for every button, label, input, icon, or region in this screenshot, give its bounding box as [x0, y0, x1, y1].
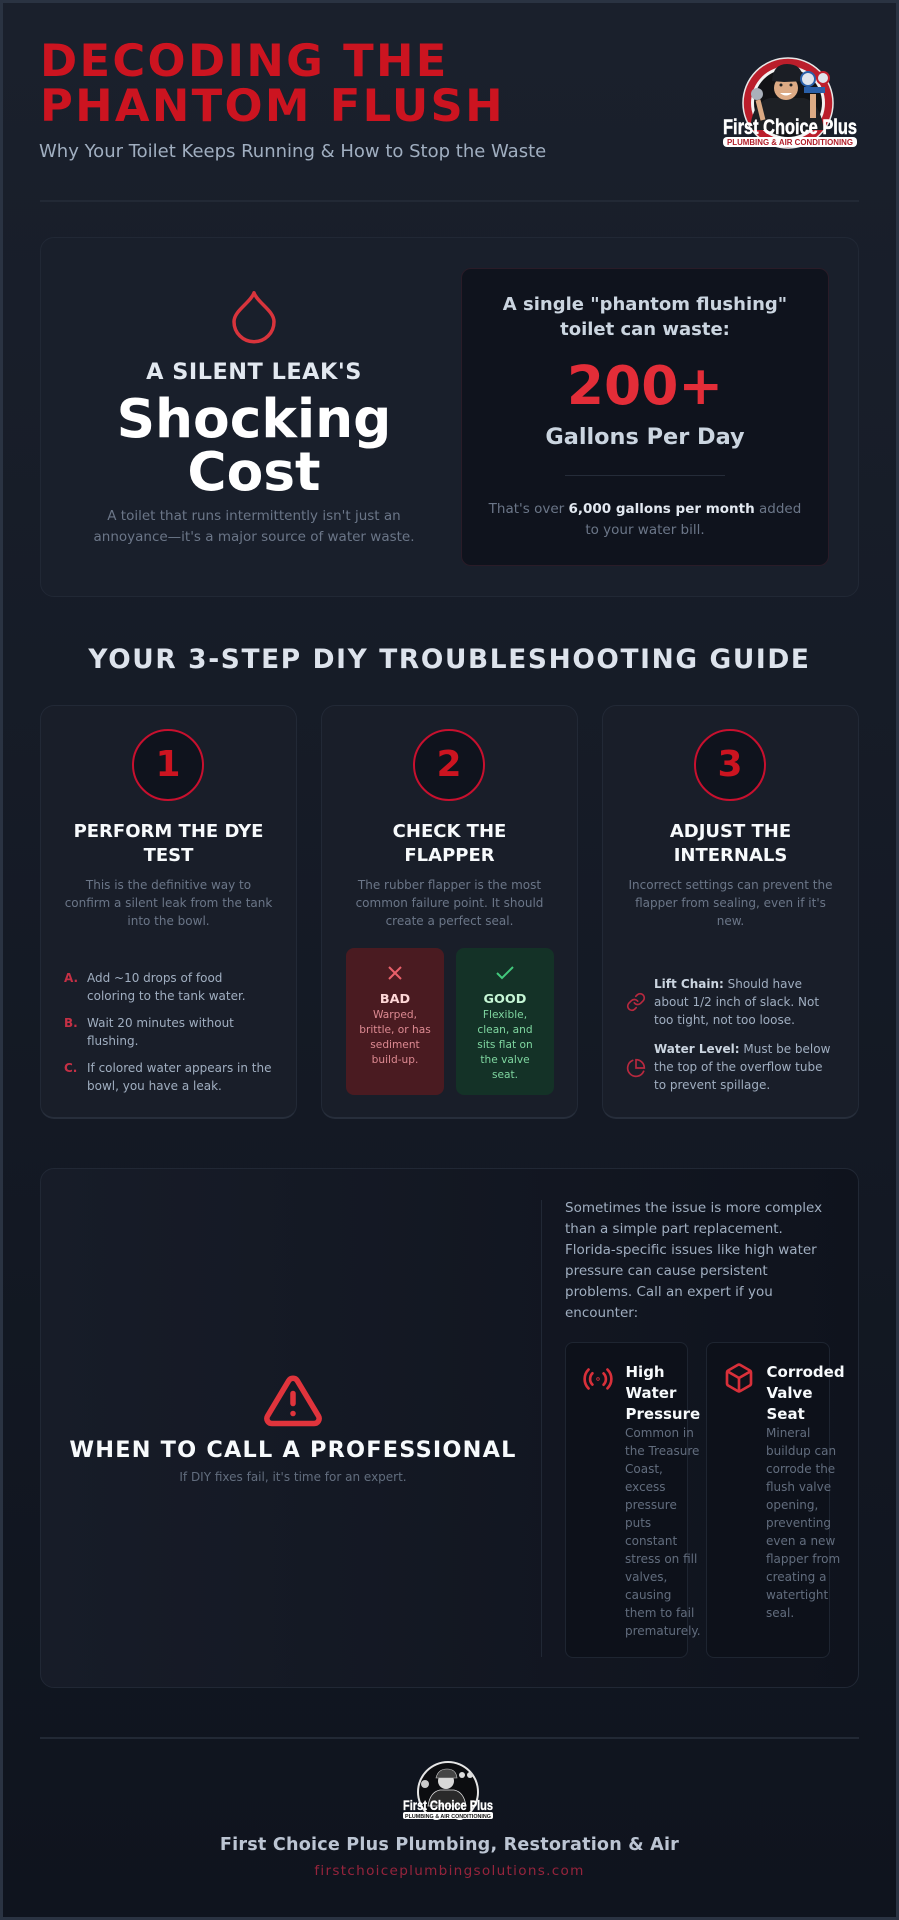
icon: cross [388, 966, 402, 980]
high water pressure description: prematurely. [625, 1624, 701, 1638]
step 3 description: Incorrect settings can prevent the [628, 878, 832, 892]
step 1 description: into the bowl. [127, 914, 210, 928]
call-out heading: WHEN TO CALL A PROFESSIONAL [69, 1437, 517, 1463]
call-out intro text: encounter: [565, 1305, 638, 1321]
corroded valve seat description: corrode the [766, 1462, 835, 1476]
bad description: brittle, or has [359, 1024, 431, 1036]
lift chain text: too tight, not too loose. [654, 1013, 795, 1027]
hero heading [117, 387, 391, 503]
lift chain text: Lift Chain: Should have [654, 977, 802, 991]
step 1 title [74, 821, 263, 866]
step 3 description: new. [717, 914, 744, 928]
statistic note [488, 500, 801, 538]
footer logo [403, 1761, 493, 1820]
corroded valve seat description: flush valve [766, 1480, 831, 1494]
high water pressure description [625, 1426, 701, 1638]
step 1 description [65, 878, 272, 928]
statistic lead-in [502, 294, 787, 340]
step 1 list: B. [64, 1016, 78, 1030]
section heading: YOUR 3-STEP DIY TROUBLESHOOTING GUIDE [88, 644, 811, 675]
statistic unit: Gallons Per Day [545, 424, 745, 450]
step 1 list: coloring to the tank water. [87, 988, 246, 1002]
step 2 title: CHECK THE [393, 821, 506, 842]
step 1 list: Wait 20 minutes without [87, 1016, 234, 1030]
high water pressure description: excess [625, 1480, 666, 1494]
bad flapper box [346, 948, 444, 1095]
statistic note: to your water bill. [585, 522, 705, 538]
step 2 description [356, 878, 543, 928]
high water pressure description: puts [625, 1516, 651, 1530]
step 3 title [670, 821, 791, 866]
water level text: the top of the overflow tube [654, 1060, 822, 1074]
statistic note: That's over 6,000 gallons per month added [489, 500, 801, 516]
high water pressure description: Coast, [625, 1462, 663, 1476]
step number 3: 3 [717, 744, 743, 784]
water level text [654, 1042, 830, 1092]
high water pressure description: stress on fill [625, 1552, 697, 1566]
icon: chain link [626, 992, 646, 1012]
good label: GOOD [484, 992, 526, 1007]
panel: shocking cost [40, 237, 859, 597]
corroded valve seat description: flapper from [766, 1552, 840, 1566]
step 1 list: bowl, you have a leak. [87, 1078, 222, 1092]
corroded valve seat description: watertight [766, 1588, 828, 1602]
corroded valve seat description: creating a [766, 1570, 826, 1584]
high water pressure description: pressure [625, 1498, 677, 1512]
step 1 title: PERFORM THE DYE [74, 821, 263, 842]
step number 1 [132, 728, 204, 800]
high water pressure description: causing [625, 1588, 671, 1602]
call-out intro text: pressure can cause persistent [565, 1263, 768, 1279]
panel: step 2 [321, 705, 578, 1119]
high water pressure title: Water [626, 1384, 676, 1402]
corroded valve seat title: Valve [766, 1384, 813, 1402]
footer company name: First Choice Plus Plumbing, Restoration & Air [220, 1835, 679, 1855]
header subtitle: Why Your Toilet Keeps Running & How to Stop the Waste [39, 141, 546, 162]
panel: step 3 [602, 705, 859, 1119]
bad description: build-up. [372, 1054, 418, 1066]
good description: Flexible, [483, 1009, 527, 1021]
high water pressure description: them to fail [625, 1606, 694, 1620]
panel: step 1 [40, 705, 297, 1119]
bad description: Warped, [373, 1009, 417, 1021]
panel: high water pressure [565, 1342, 688, 1658]
corroded valve seat title: Corroded [766, 1363, 845, 1381]
header title [40, 34, 505, 132]
header title: PHANTOM FLUSH [40, 79, 505, 132]
call-out intro text: Florida-specific issues like high water [565, 1242, 817, 1258]
high water pressure description: valves, [625, 1570, 667, 1584]
icon: pie gauge [626, 1058, 646, 1078]
corroded valve seat description: preventing [766, 1516, 831, 1530]
step 3 description: flapper from sealing, even if it's [635, 896, 826, 910]
step number 2 [413, 728, 485, 800]
hero description: A toilet that runs intermittently isn't just an [107, 508, 401, 524]
good description [477, 1009, 533, 1081]
step 1 title: TEST [144, 845, 193, 866]
step 3 description [628, 878, 832, 928]
statistic lead-in: A single "phantom flushing" [503, 294, 787, 314]
hero kicker: A SILENT LEAK'S [146, 359, 362, 385]
high water pressure description: constant [625, 1534, 677, 1548]
hero description [93, 508, 415, 545]
lift chain text: about 1/2 inch of slack. Not [654, 995, 819, 1009]
high water pressure title: High [626, 1363, 665, 1381]
call-out intro text [565, 1200, 822, 1321]
panel: waste statistic [461, 268, 829, 566]
step 1 description: This is the definitive way to [86, 878, 251, 892]
good description: sits flat on [477, 1039, 533, 1051]
header title: DECODING THE [40, 34, 449, 87]
step number 1: 1 [155, 744, 181, 784]
corroded valve seat description: buildup can [766, 1444, 836, 1458]
step 1 list: flushing. [87, 1034, 138, 1048]
water level text: Water Level: Must be below [654, 1042, 830, 1056]
good description: the valve [480, 1054, 530, 1066]
bad description: sediment [370, 1039, 420, 1051]
statistic number: 200+ [567, 354, 723, 417]
step 1 list: C. [64, 1060, 77, 1074]
call-out intro text: Sometimes the issue is more complex [565, 1200, 822, 1216]
step 1 list: If colored water appears in the [87, 1060, 271, 1074]
icon: warning triangle [264, 1376, 322, 1426]
good flapper box [456, 948, 554, 1095]
step 2 title [393, 821, 506, 866]
step 1 list: A. [64, 970, 78, 984]
statistic lead-in: toilet can waste: [560, 318, 730, 340]
step 3 title: ADJUST THE [670, 821, 791, 842]
corroded valve seat description: opening, [766, 1498, 818, 1512]
bad description [359, 1009, 431, 1066]
step 2 description: common failure point. It should [356, 896, 543, 910]
corroded valve seat description [766, 1426, 840, 1620]
step 1 list: Add ~10 drops of food [87, 970, 222, 984]
lift chain text [654, 977, 819, 1027]
header logo [723, 57, 857, 149]
icon: box [726, 1363, 752, 1393]
high water pressure description: Common in [625, 1426, 694, 1440]
corroded valve seat title: Seat [766, 1405, 805, 1423]
icon: water drop [232, 291, 276, 344]
step 3 title: INTERNALS [674, 845, 787, 866]
high water pressure title [626, 1363, 700, 1423]
good description: clean, and [477, 1024, 533, 1036]
hero heading: Shocking [117, 387, 391, 450]
call-out subheading: If DIY fixes fail, it's time for an expert. [179, 1470, 407, 1484]
call-out intro text: problems. Call an expert if you [565, 1284, 773, 1300]
step 2 description: The rubber flapper is the most [358, 878, 541, 892]
panel: corroded valve seat [706, 1342, 830, 1658]
icon: radio signal [583, 1368, 613, 1390]
corroded valve seat title [766, 1363, 845, 1423]
step 2 title: FLAPPER [404, 845, 495, 866]
panel: when to call a professional [40, 1168, 859, 1688]
call-out intro text: than a simple part replacement. [565, 1221, 783, 1237]
hero heading: Cost [187, 440, 321, 503]
header logo: PLUMBING & AIR CONDITIONING [727, 138, 853, 147]
high water pressure description: the Treasure [625, 1444, 699, 1458]
footer logo: PLUMBING & AIR CONDITIONING [405, 1814, 491, 1820]
step number 2: 2 [436, 744, 462, 784]
water level text: to prevent spillage. [654, 1078, 770, 1092]
good description: seat. [492, 1069, 518, 1081]
step 1 description: confirm a silent leak from the tank [65, 896, 272, 910]
step 2 description: create a perfect seal. [386, 914, 513, 928]
hero description: annoyance—it's a major source of water waste. [93, 529, 415, 545]
high water pressure title: Pressure [626, 1405, 700, 1423]
icon: check [496, 966, 514, 980]
bad label: BAD [380, 992, 410, 1007]
corroded valve seat description: Mineral [766, 1426, 810, 1440]
corroded valve seat description: seal. [766, 1606, 794, 1620]
step number 3 [694, 728, 766, 800]
footer website: firstchoiceplumbingsolutions.com [314, 1863, 585, 1879]
corroded valve seat description: even a new [766, 1534, 835, 1548]
step 1 list [64, 970, 271, 1092]
